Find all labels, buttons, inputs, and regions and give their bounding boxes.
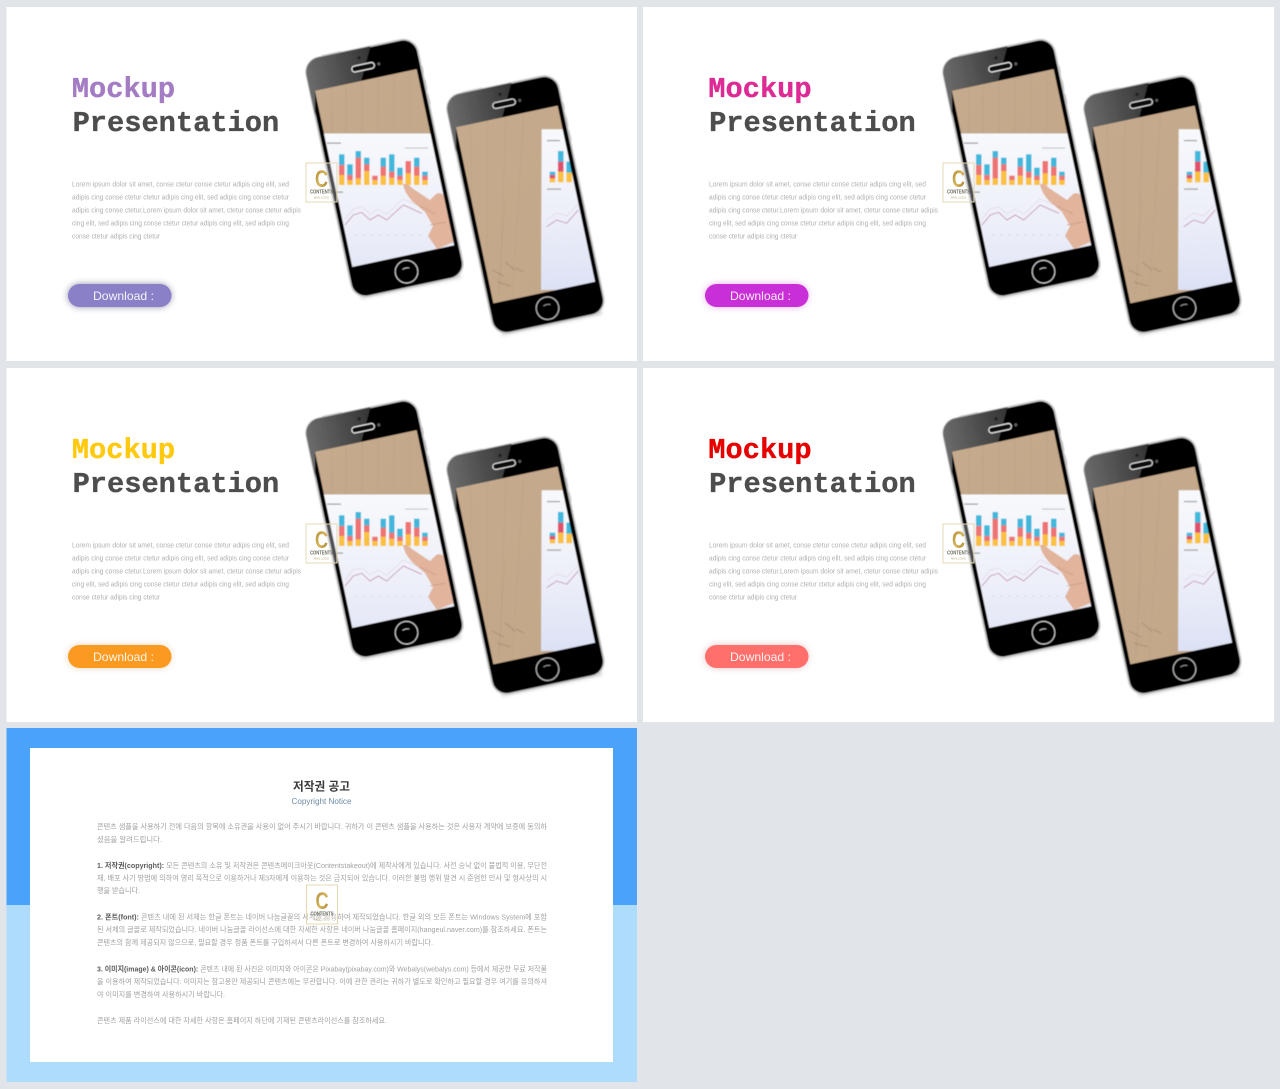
- section: image and icon: 야 이미지를 변경하여 사용하시기 바랍니다.: [97, 989, 225, 999]
- watermark logo: [943, 163, 974, 202]
- title: Presentation: [709, 468, 916, 501]
- section: font: 된 서체의 글꼴로 제작되었습니다. 네이버 나눔글꼴 라이선스에 대한 자세한 사항은 네이버 나눔글꼴 홈페이지(hangeul.naver.com)를 참조하세요. 폰트는: [97, 924, 547, 934]
- body text: adipis cing conse ctetur ctetur adipis cing elit, sed adipis cing conse ctetur: [72, 192, 289, 202]
- body text: adipis cing conse ctetur.Lorem ipsum dolor sit amet, ctetur conse ctetur adipis: [72, 206, 301, 214]
- watermark logo: C: [952, 166, 965, 193]
- section: copyright: [97, 860, 547, 895]
- section: copyright: 1. 저작권(copyright): 모든 콘텐츠의 소유 및 저작권은 콘텐츠메이크아웃(Contentstakeout)에 제작사에게 있습니다. 사전 승낙 없이 불법적 이용, 무단전: [97, 860, 547, 870]
- body text: conse ctetur adipis cing ctetur: [72, 232, 160, 240]
- body text: conse ctetur adipis cing ctetur: [709, 592, 797, 602]
- title: [72, 434, 279, 501]
- watermark logo: MAIL LOGO: [951, 556, 967, 560]
- heading: 저작권 공고: [293, 778, 350, 794]
- icon: two phones: [247, 15, 678, 388]
- download button: Download :: [93, 289, 154, 303]
- panel: copyright notice: [6, 728, 637, 1082]
- body text: Lorem ipsum dolor sit amet, conse ctetur conse ctetur adipis cing elit, sed: [709, 180, 926, 188]
- body text: adipis cing conse ctetur ctetur adipis cing elit, sed adipis cing conse ctetur: [72, 554, 289, 562]
- title: [708, 73, 916, 140]
- watermark logo: C: [315, 166, 328, 193]
- title: [708, 434, 916, 501]
- title: Presentation: [73, 107, 279, 140]
- watermark logo: MAIL LOGO: [314, 918, 330, 922]
- icon: two phones: [884, 15, 1280, 388]
- watermark logo: MAIL LOGO: [314, 556, 330, 560]
- section: copyright: 재, 배포 사기 방법에 의하여 영리 목적으로 이용하거나 제3자에게 이용하는 것은 금지되어 있습니다. 이러한 불법 행위 발견 시 준엄한 민사 및 형사상의 시: [97, 872, 547, 882]
- watermark logo: CONTENTS: [310, 550, 334, 556]
- title: [72, 73, 279, 140]
- panel: mockup slide yellow: [6, 368, 678, 749]
- watermark logo: [943, 524, 974, 563]
- panel: mockup slide purple: [6, 7, 678, 388]
- watermark logo: CONTENTS: [947, 190, 971, 196]
- watermark logo: CONTENTS: [310, 912, 334, 918]
- panel: mockup slide red: [643, 368, 1280, 749]
- watermark logo: C: [315, 527, 328, 554]
- section: copyright: 행을 받습니다.: [97, 885, 140, 895]
- body text: [72, 540, 301, 602]
- watermark logo: [306, 524, 337, 563]
- body text: Lorem ipsum dolor sit amet, conse ctetur conse ctetur adipis cing elit, sed: [72, 180, 289, 188]
- watermark logo: CONTENTS: [310, 190, 334, 196]
- body text: [709, 180, 938, 240]
- body text: Lorem ipsum dolor sit amet, conse ctetur conse ctetur adipis cing elit, sed: [709, 540, 926, 550]
- intro paragraph: 콘텐츠 샘플을 사용하기 전에 다음의 항목에 소유권을 사용이 없어 주시기 바랍니다. 귀하가 이 콘텐츠 샘플을 사용하는 것은 사용자 계약에 보증에 동의하: [97, 821, 547, 831]
- download button: Download :: [730, 650, 791, 664]
- watermark logo: [306, 885, 338, 924]
- section: font: 콘텐츠의 함께 제공되지 않으므로, 필요할 경우 정품 폰트를 구입하셔서 다른 폰트로 변경하여 사용하시기 바랍니다.: [97, 937, 433, 947]
- title: Presentation: [709, 107, 916, 140]
- section: image and icon: 3. 이미지(image) & 아이콘(icon): 콘텐츠 내에 된 사진은 이미지와 아이콘은 Pixabay(pixabay.com)와 Webalys(webalys.com) 등에서 제공한 무료 저작물: [97, 964, 547, 974]
- closing note: 콘텐츠 제품 라이선스에 대한 자세한 사항은 홈페이지 하단에 기재된 콘텐츠라이선스를 참조하세요.: [97, 1015, 387, 1025]
- watermark logo: C: [316, 888, 328, 915]
- download button: [705, 645, 808, 668]
- download button: Download :: [730, 289, 791, 303]
- download button: [705, 284, 808, 307]
- title: Mockup: [708, 73, 812, 106]
- body text: [72, 180, 301, 240]
- body text: Lorem ipsum dolor sit amet, conse ctetur conse ctetur adipis cing elit, sed: [72, 540, 289, 550]
- intro paragraph: 셨음을 알려드립니다.: [97, 834, 162, 844]
- body text: adipis cing conse ctetur.Lorem ipsum dolor sit amet, ctetur conse ctetur adipis: [709, 566, 938, 576]
- icon: two phones: [247, 376, 678, 749]
- body text: adipis cing conse ctetur ctetur adipis cing elit, sed adipis cing conse ctetur: [709, 554, 926, 562]
- body text: conse ctetur adipis cing ctetur: [72, 592, 160, 602]
- watermark logo: MAIL LOGO: [314, 196, 330, 200]
- section: image and icon: [97, 964, 547, 999]
- title: Presentation: [73, 468, 279, 501]
- watermark logo: [306, 163, 337, 202]
- body text: adipis cing conse ctetur ctetur adipis cing elit, sed adipis cing conse ctetur: [709, 192, 926, 202]
- section: font: [97, 912, 547, 947]
- icon: two phones: [884, 376, 1280, 749]
- watermark logo: C: [952, 527, 965, 554]
- subheading: Copyright Notice: [292, 797, 352, 806]
- body text: cing elit, sed adipis cing conse ctetur ctetur adipis cing elit, sed adipis cing: [72, 218, 289, 228]
- body text: adipis cing conse ctetur.Lorem ipsum dolor sit amet, ctetur conse ctetur adipis: [72, 566, 301, 576]
- body text: cing elit, sed adipis cing conse ctetur ctetur adipis cing elit, sed adipis cing: [709, 580, 926, 588]
- body text: adipis cing conse ctetur.Lorem ipsum dolor sit amet, ctetur conse ctetur adipis: [709, 206, 938, 214]
- body text: [709, 540, 938, 602]
- section: image and icon: 을 이용하여 제작되었습니다. 이미지는 참고용만 제공되니 콘텐츠에는 무관합니다. 이에 관한 권리는 귀하가 별도로 확인하고 필요할 경우 여기를 유의하셔: [97, 976, 547, 986]
- section: font: 2. 폰트(font): 콘텐츠 내에 된 서체는 한글 폰트는 네이버 나눔글꼴의 서체를 사용하여 제작되었습니다. 한글 외의 모든 폰트는 Windows System에 포함: [97, 912, 547, 922]
- intro paragraph: [97, 821, 547, 844]
- body text: cing elit, sed adipis cing conse ctetur ctetur adipis cing elit, sed adipis cing: [72, 580, 289, 588]
- download button: Download :: [93, 650, 154, 664]
- title: Mockup: [72, 73, 175, 106]
- watermark logo: CONTENTS: [947, 550, 971, 556]
- body text: cing elit, sed adipis cing conse ctetur ctetur adipis cing elit, sed adipis cing: [709, 218, 926, 228]
- download button: [68, 645, 172, 668]
- download button: [68, 284, 172, 307]
- body text: conse ctetur adipis cing ctetur: [709, 232, 797, 240]
- panel: mockup slide magenta: [643, 7, 1280, 388]
- watermark logo: MAIL LOGO: [951, 196, 967, 200]
- title: Mockup: [72, 434, 175, 467]
- title: Mockup: [708, 434, 812, 467]
